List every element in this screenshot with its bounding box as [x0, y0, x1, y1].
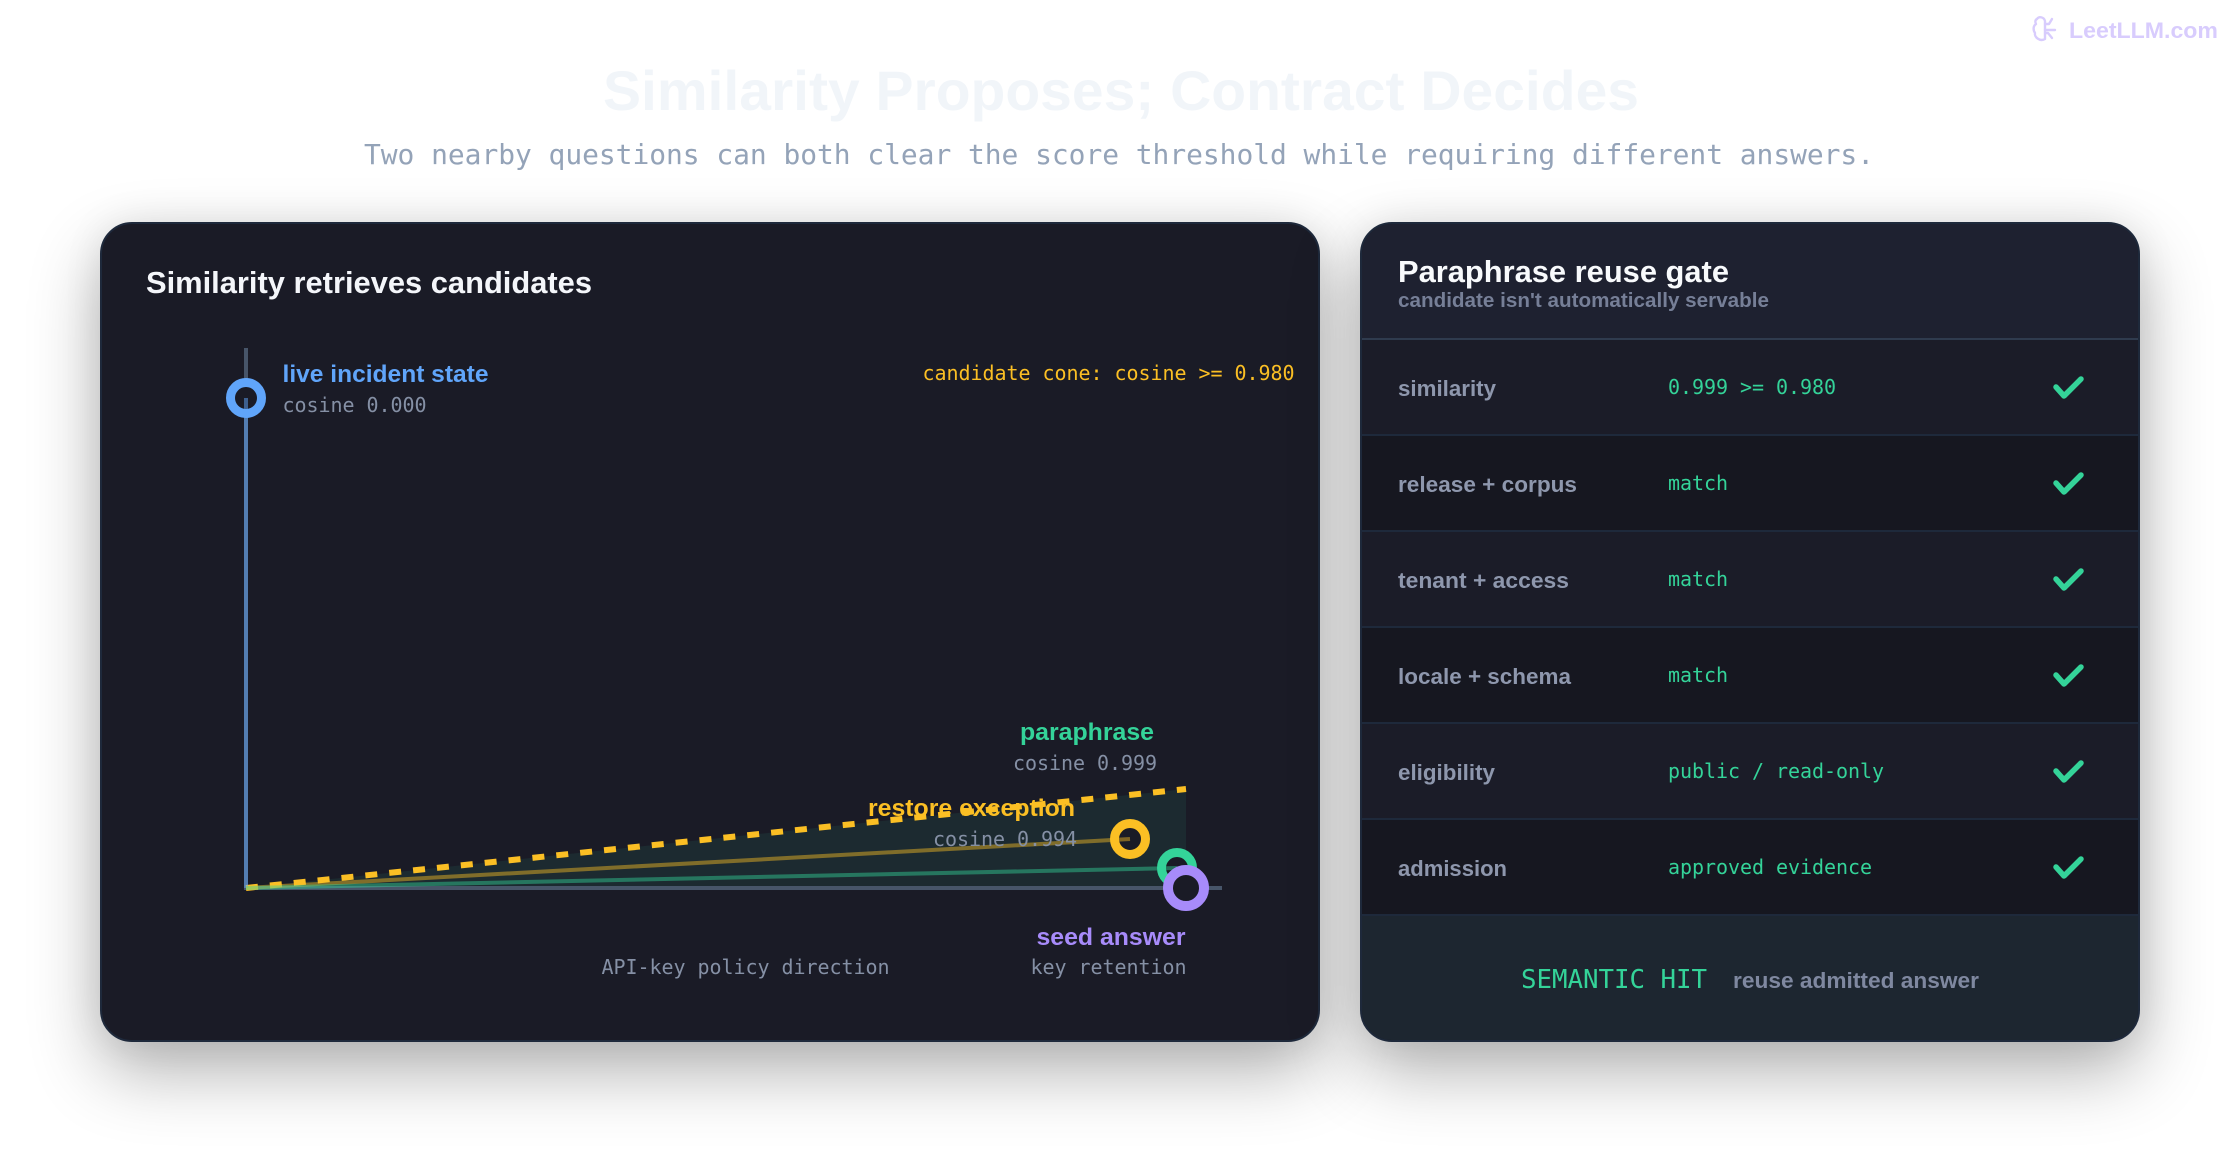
row: release + corpus [1360, 435, 2140, 531]
point: restore exception [246, 824, 1146, 888]
label: live incident state: cosine 0.000 [282, 393, 427, 417]
row: locale + schema: match [1668, 663, 1728, 687]
row: tenant + access: match [1668, 567, 1728, 591]
label: paraphrase: cosine 0.999 [1013, 751, 1157, 775]
label: live incident state [282, 361, 488, 417]
watermark: LeetLLM.com [2032, 16, 2218, 43]
label: seed answer: seed answer [1036, 924, 1186, 951]
verdict footer: reuse admitted answer [1733, 968, 1979, 993]
label: seed answer: key retention [1030, 955, 1187, 979]
label: axis direction: API-key policy direction [602, 955, 890, 979]
row: similarity [1360, 340, 2140, 435]
panel heading: Similarity retrieves candidates [146, 265, 592, 300]
chart: candidate cone vectors [146, 265, 1295, 979]
label: restore exception [868, 795, 1077, 851]
point: seed answer [1168, 870, 1204, 906]
label: paraphrase: paraphrase [1020, 719, 1154, 746]
verdict footer [1360, 916, 2140, 1042]
row: tenant + access [1360, 531, 2140, 627]
row: similarity: similarity [1398, 376, 1497, 401]
row: eligibility: public / read-only [1668, 759, 1884, 783]
row: eligibility: eligibility [1398, 760, 1496, 785]
gate table [1362, 224, 2138, 1040]
row: locale + schema: locale + schema [1398, 664, 1572, 689]
title and subtitle [364, 59, 1874, 171]
label: paraphrase [1013, 719, 1157, 775]
label: seed answer [1030, 924, 1187, 979]
point: paraphrase [246, 852, 1192, 888]
subtitle: Two nearby questions can both clear the score threshold while requiring different answers. [364, 138, 1874, 171]
label: restore exception: restore exception [868, 795, 1075, 822]
panel header: Paraphrase reuse gate [1398, 254, 1729, 289]
row: locale + schema [1360, 627, 2140, 723]
panel: similarity retrieves candidates [100, 222, 1320, 1042]
row: admission: admission [1398, 856, 1507, 881]
row: admission [1360, 819, 2140, 915]
verdict footer: SEMANTIC HIT [1521, 965, 1707, 995]
row: release + corpus: match [1668, 471, 1728, 495]
row: similarity: 0.999 >= 0.980 [1668, 375, 1836, 399]
row: release + corpus: release + corpus [1398, 472, 1577, 497]
title: Similarity Proposes; Contract Decides [603, 59, 1639, 122]
candidate cone fill [246, 789, 1186, 888]
axes [244, 348, 1222, 890]
row dividers [1360, 434, 2140, 916]
label: restore exception: cosine 0.994 [933, 827, 1077, 851]
row: eligibility [1360, 723, 2140, 819]
panel header [1360, 222, 2140, 340]
point: live incident state [230, 382, 262, 888]
panel: paraphrase reuse gate [1360, 222, 2140, 1042]
watermark text: LeetLLM.com [2069, 18, 2218, 43]
row: admission: approved evidence [1668, 855, 1872, 879]
row: tenant + access: tenant + access [1398, 568, 1569, 593]
panel header: candidate isn't automatically servable [1398, 290, 1769, 312]
icon: brain [2034, 17, 2055, 40]
label: live incident state: live incident state [282, 361, 488, 388]
candidate cone dashed boundary [246, 789, 1186, 888]
label: candidate cone: candidate cone: cosine >= 0.980 [922, 361, 1295, 385]
